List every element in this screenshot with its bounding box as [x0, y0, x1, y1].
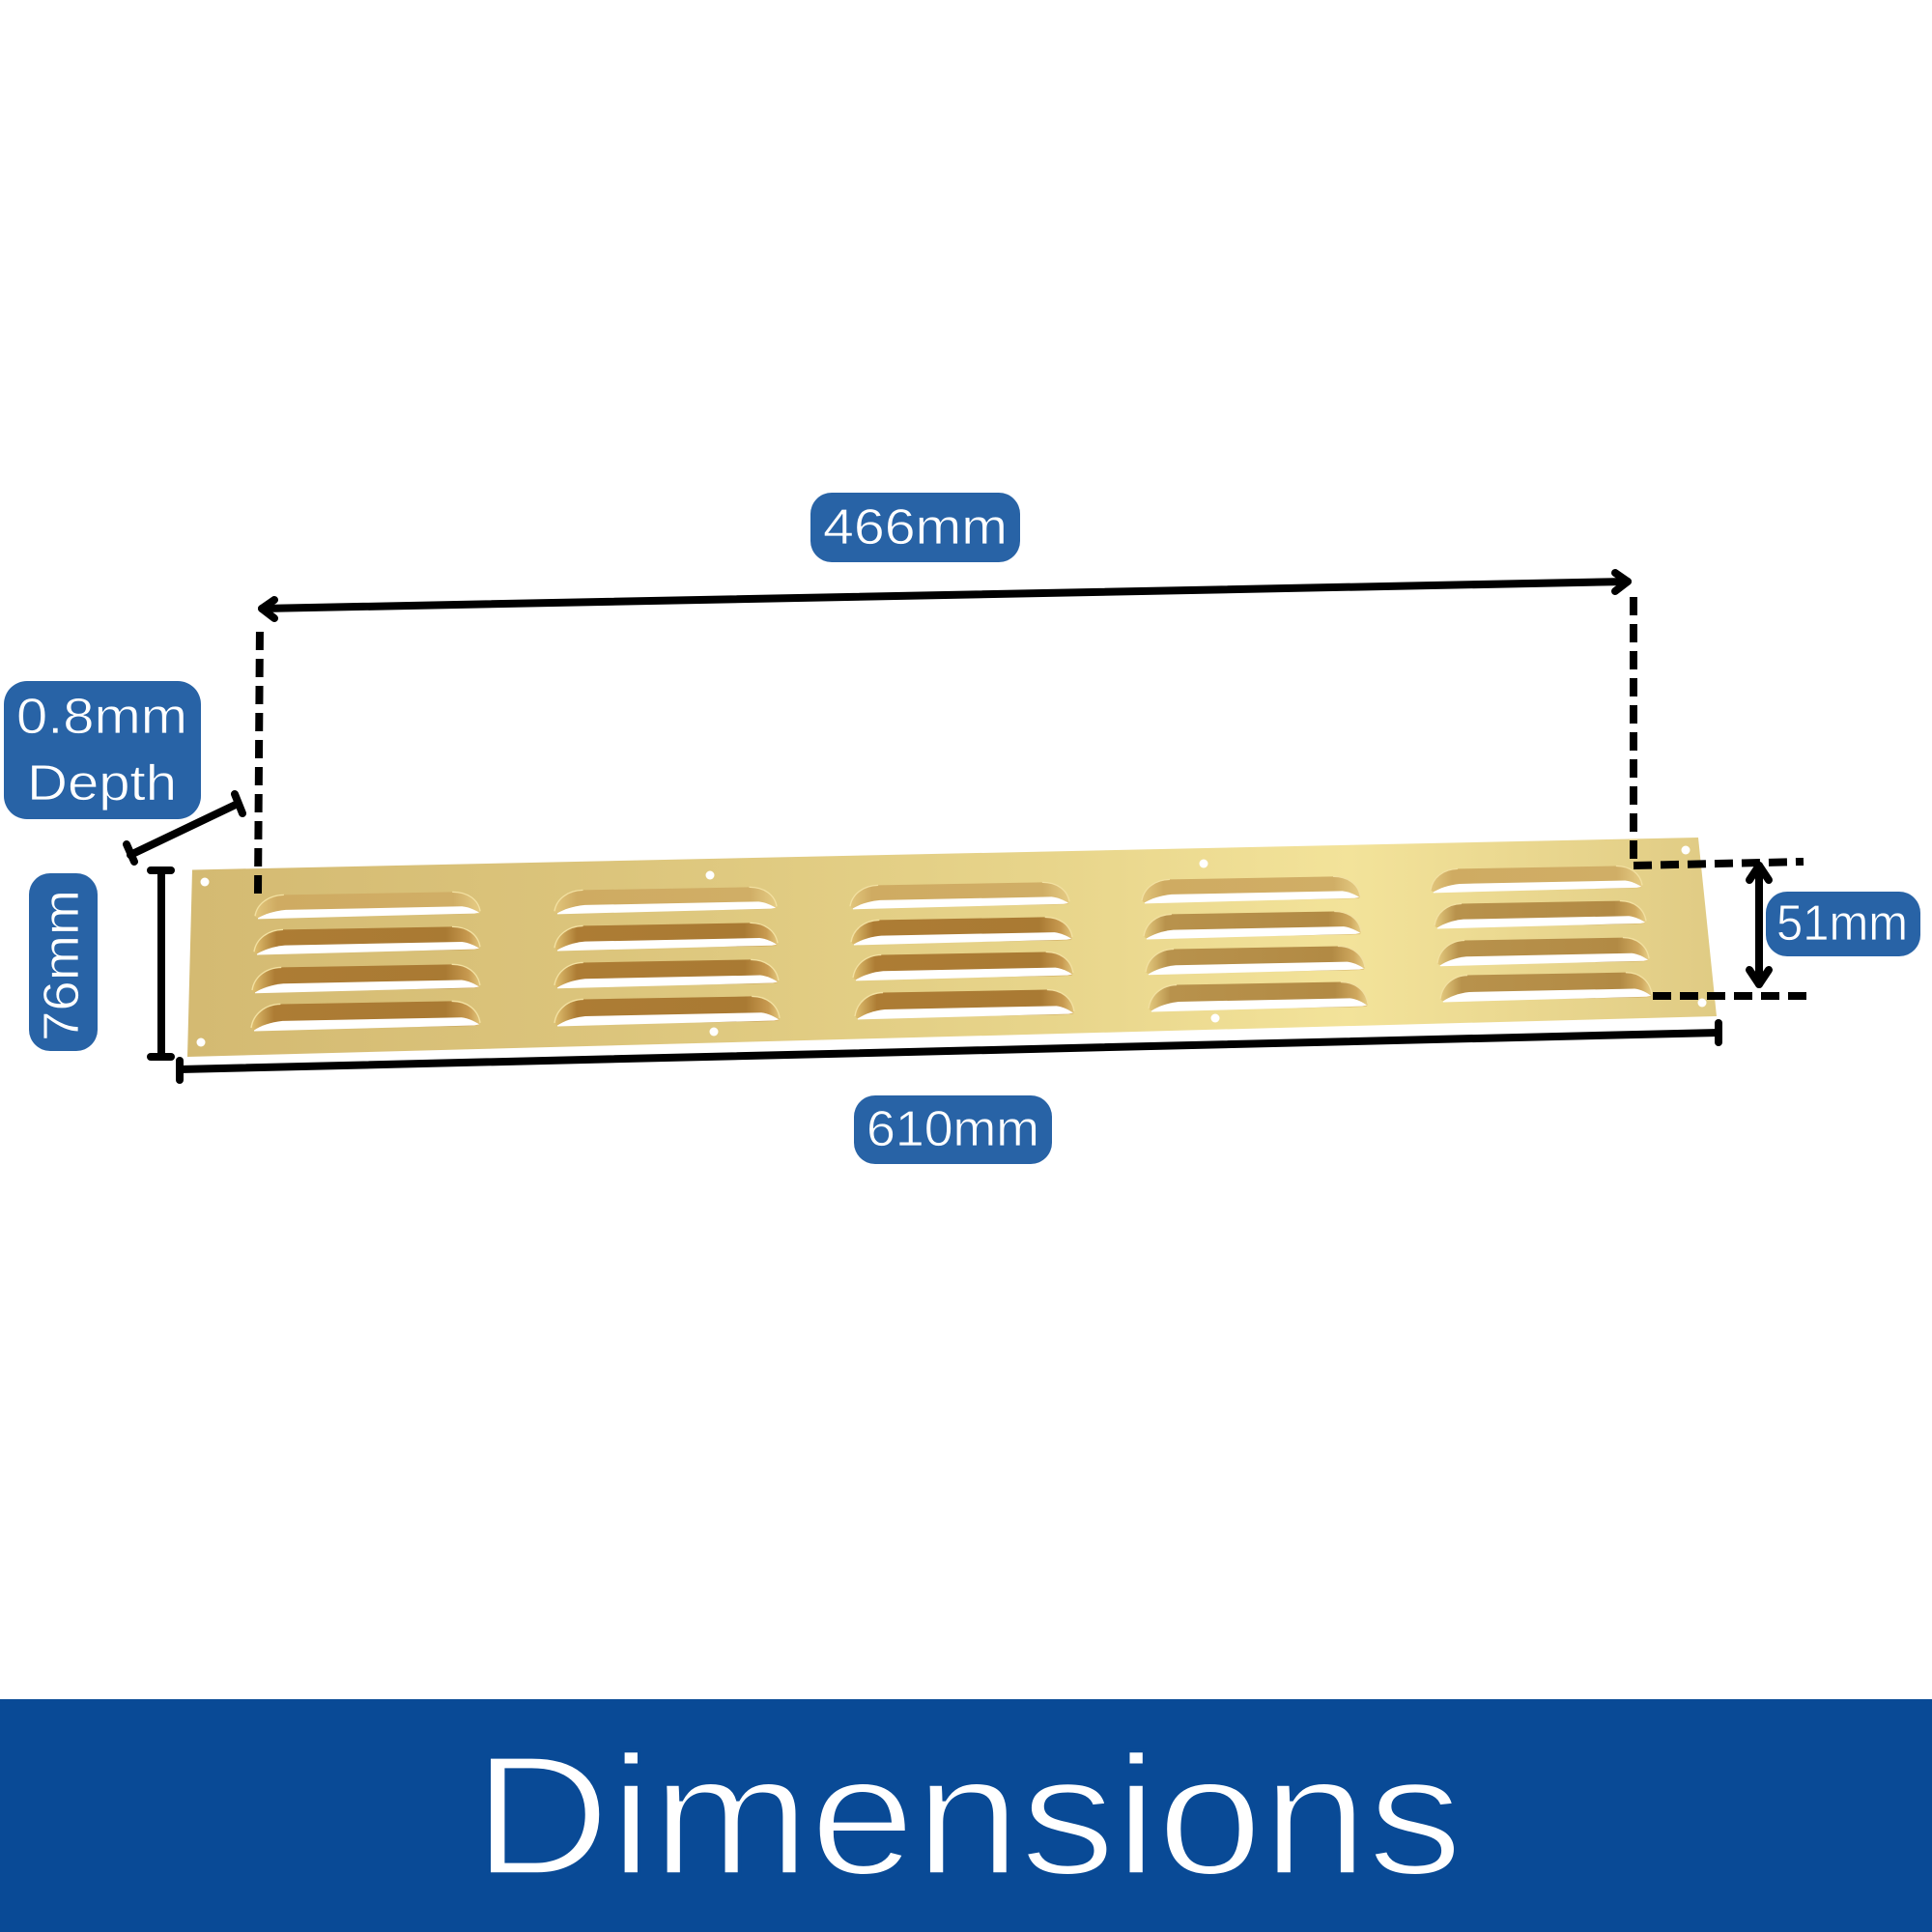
mounting holes	[197, 846, 1706, 1047]
louvre group 2	[554, 887, 780, 1026]
label: 610mm	[854, 1095, 1052, 1164]
label: 76mm: 76mm	[34, 890, 90, 1041]
label: 466mm: 466mm	[823, 499, 1008, 555]
louvre group 3	[850, 882, 1074, 1020]
dashed guide: 466mm left	[258, 624, 260, 894]
plate body	[187, 838, 1717, 1057]
louvre group 1	[251, 892, 480, 1032]
dashed guide: 51mm top	[1634, 862, 1804, 866]
arrow: 466mm span	[262, 573, 1628, 618]
label: 610mm: 610mm	[867, 1101, 1039, 1157]
bracket: 610mm width	[180, 1023, 1719, 1080]
arrow: 51mm height	[1749, 866, 1769, 984]
dashed guide: 51mm bottom	[1653, 992, 1807, 1000]
bracket: 76mm height	[151, 870, 171, 1057]
title banner: Dimensions	[473, 1721, 1463, 1911]
title banner	[0, 1699, 1932, 1932]
bracket: 0.8mm depth	[127, 794, 242, 862]
vent plate	[187, 838, 1717, 1057]
louvre group 4	[1142, 876, 1368, 1012]
dashed guide: 466mm right	[1630, 594, 1637, 859]
label: 0.8mm depth	[4, 681, 201, 819]
louvre group 5	[1431, 866, 1652, 1003]
label: 466mm	[810, 493, 1020, 562]
label: 76mm	[29, 873, 98, 1051]
label: 0.8mm depth: Depth	[27, 755, 177, 811]
label: 51mm: 51mm	[1776, 895, 1908, 952]
label: 0.8mm depth: 0.8mm	[16, 689, 187, 745]
